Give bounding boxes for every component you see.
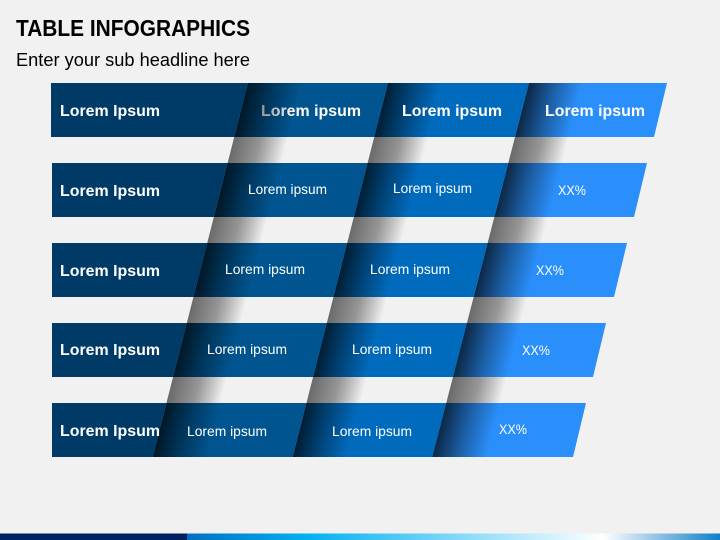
row 3 labels: Lorem ipsum — [370, 262, 450, 277]
row 4 labels: Lorem ipsum — [207, 342, 287, 357]
footer bar — [0, 534, 720, 540]
row 2 labels: Lorem ipsum — [248, 182, 327, 197]
row 1 header: Lorem ipsum — [261, 103, 361, 120]
row 4 labels: XX% — [522, 342, 550, 358]
row 2 labels: Lorem Ipsum — [60, 183, 160, 200]
row 5 labels: Lorem ipsum — [187, 424, 267, 439]
row 1 labels: Lorem ipsum — [545, 103, 645, 120]
row 3 labels — [60, 262, 564, 280]
row 1 labels: Lorem ipsum — [402, 103, 502, 120]
shadow bands over rows — [153, 83, 583, 457]
row 4 labels: Lorem Ipsum — [60, 342, 160, 359]
row 2 labels — [60, 181, 586, 200]
row 2 — [52, 163, 647, 217]
row 2 labels: XX% — [558, 182, 586, 198]
row 3 labels: Lorem Ipsum — [60, 263, 160, 280]
row 5 — [52, 403, 586, 457]
title: TABLE INFOGRAPHICS — [16, 15, 250, 41]
row 3 — [52, 243, 627, 297]
row 1 labels — [402, 103, 645, 120]
row 5 labels — [60, 421, 527, 440]
row 5 labels: Lorem Ipsum — [60, 423, 160, 440]
subtitle: Enter your sub headline here — [16, 50, 250, 70]
row 3 labels: Lorem ipsum — [225, 262, 305, 277]
row 4 labels: Lorem ipsum — [352, 342, 432, 357]
row 4 — [52, 323, 606, 377]
row 3 labels: XX% — [536, 262, 564, 278]
row 4 labels — [60, 342, 550, 359]
row 2 labels: Lorem ipsum — [393, 181, 472, 196]
shadow bands in row gaps — [166, 137, 569, 403]
row 1 header — [51, 83, 667, 137]
row 1 header: Lorem Ipsum — [60, 103, 160, 120]
row 5 labels: Lorem ipsum — [332, 424, 412, 439]
row 5 labels: XX% — [499, 421, 527, 437]
